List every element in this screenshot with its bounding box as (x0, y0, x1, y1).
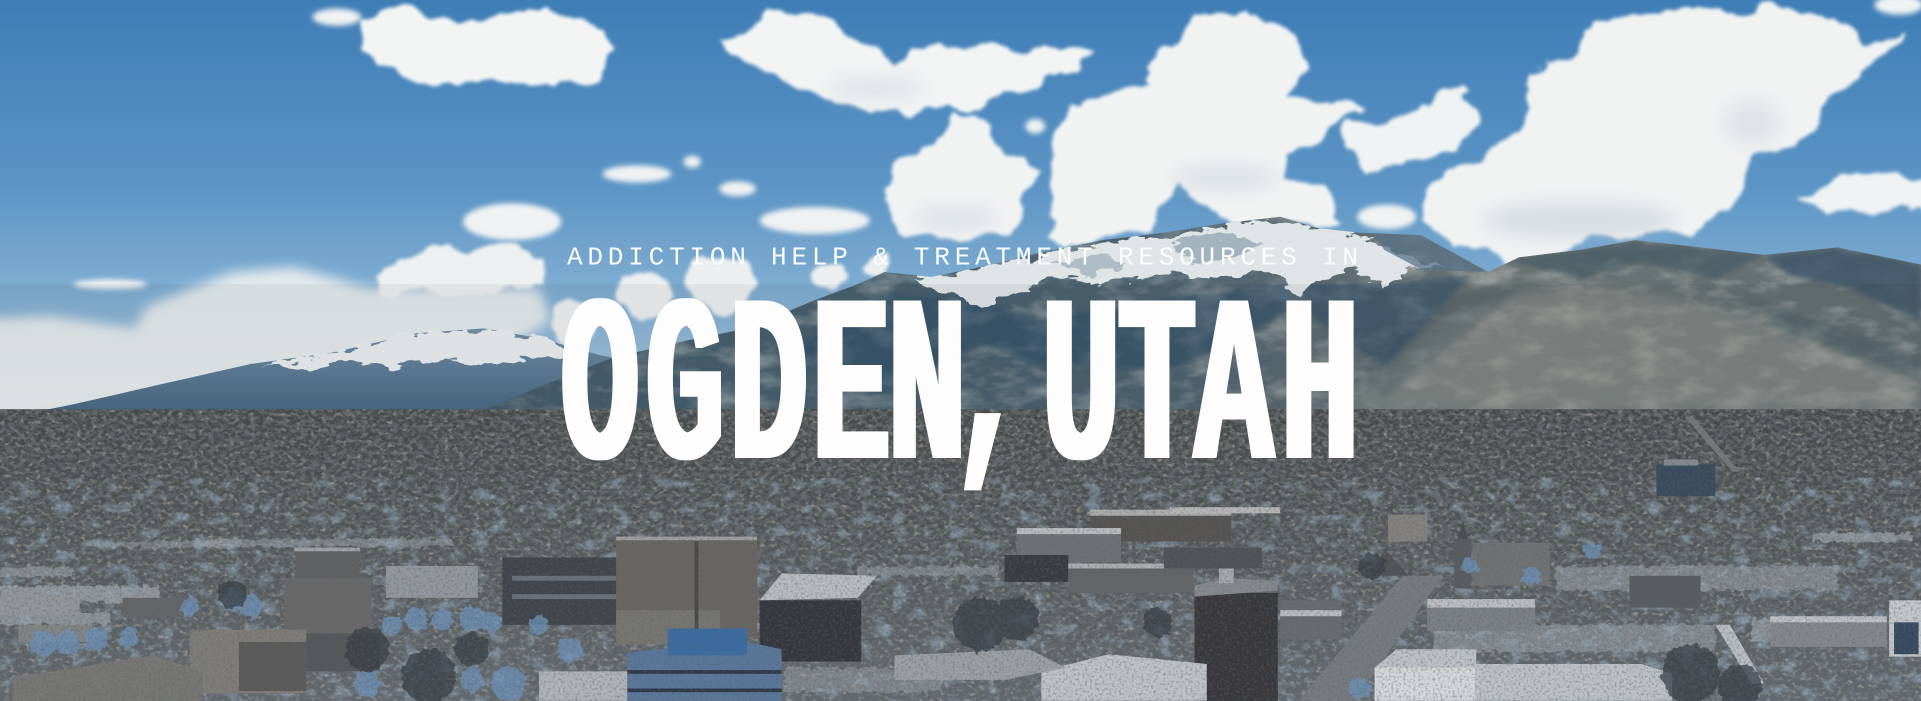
main mountain range (478, 208, 1921, 417)
building: low office left (190, 630, 306, 693)
building: hotel tower (616, 537, 757, 644)
building: pale low block (386, 566, 478, 598)
cloud: far right (1795, 0, 1921, 211)
building: dark glass with pale roof (760, 573, 877, 662)
snow caps on left range (263, 328, 588, 371)
sunlit rock right side (1354, 284, 1921, 412)
tree canopy texture (0, 409, 1921, 701)
fine detail grain over city (0, 409, 1921, 701)
building: white block beside tower (1041, 654, 1207, 701)
building: left roofs (0, 595, 184, 642)
cloud: large right cumulus (1415, 6, 1905, 263)
main title: Ogden, Utah: OGDEN, UTAH (561, 248, 1359, 530)
rock texture on range (478, 208, 1921, 417)
far left mountain range (0, 328, 686, 419)
building: white retail bottom right (1375, 649, 1672, 701)
building: roofs bottom centre (894, 649, 1066, 680)
clouds behind title (551, 252, 894, 349)
building: dark office (502, 557, 616, 625)
snow fields (913, 219, 1446, 309)
sky (0, 0, 1921, 417)
building: lot buildings right (1427, 576, 1921, 657)
building: church (1372, 521, 1550, 588)
building: bottom left flat roof (12, 655, 202, 701)
building: blue glass office (627, 628, 782, 701)
clouds (0, 0, 1921, 429)
cloud: small right of centre (1348, 88, 1476, 174)
valley city land (0, 409, 1921, 701)
hazy horizon cloud bank left (0, 245, 551, 429)
main street diagonal (1299, 576, 1443, 701)
blue tree clusters (29, 543, 1601, 701)
pale streets and lots (0, 533, 1911, 692)
cloud: left tower of central group (885, 110, 1039, 239)
cloud: central cumulus (1047, 10, 1366, 245)
subtitle: addiction help and treatment resources in: ADDICTION HELP & TREATMENT RESOURCES IN (567, 242, 1358, 272)
building: Ben Lomond tower (270, 548, 380, 671)
building: dark brick tower (1194, 564, 1278, 701)
building: far glass tower (1656, 459, 1715, 496)
shadowed valley (784, 276, 1470, 392)
blue trees texture (0, 478, 1921, 701)
building: downtown blocks (1005, 507, 1427, 640)
dark overlay band under subtitle (0, 284, 1921, 701)
cloud: top centre (719, 6, 1096, 116)
dark tree clusters (218, 553, 1762, 701)
building: pale roof bottom centre (539, 671, 627, 701)
small clouds (74, 9, 1416, 289)
cloud: top left (355, 6, 610, 89)
shadow ridge right (1764, 247, 1921, 321)
